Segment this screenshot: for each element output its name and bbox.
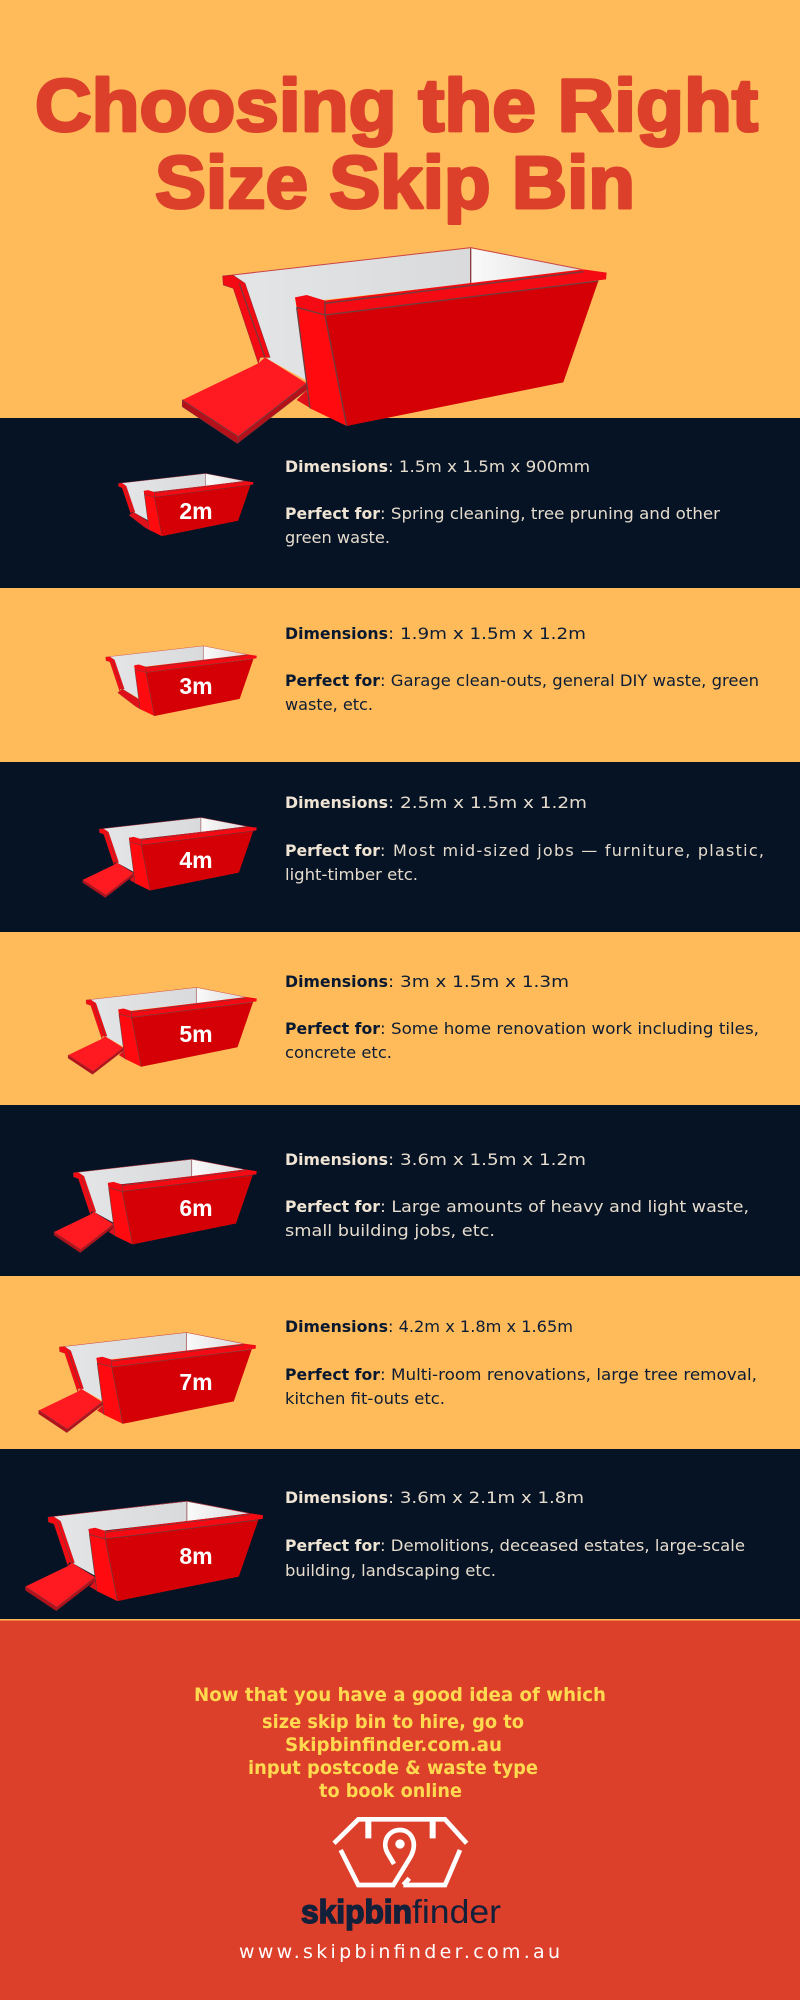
perfect for: Perfect for xyxy=(285,671,380,690)
dimensions: Dimensions xyxy=(285,1150,388,1169)
icon: 8m bin xyxy=(25,1501,263,1611)
panel: 2m xyxy=(0,418,800,588)
perfect for: green waste. xyxy=(285,528,390,547)
icon: 2m bin xyxy=(118,473,253,536)
perfect for xyxy=(285,1365,757,1408)
call to action text: size skip bin to hire, go to xyxy=(262,1711,524,1733)
label: 6m: 6m xyxy=(179,1195,213,1221)
perfect for: building, landscaping etc. xyxy=(285,1561,496,1580)
dimensions: : 4.2m x 1.8m x 1.65m xyxy=(388,1317,573,1336)
panel: 6m xyxy=(0,1105,800,1276)
dimensions: Dimensions xyxy=(285,457,388,476)
logo wordmark xyxy=(301,1893,501,1930)
icon: 3m bin xyxy=(106,646,257,716)
label: 5m: 5m xyxy=(179,1021,213,1047)
perfect for: : Multi-room renovations, large tree removal, xyxy=(380,1365,757,1384)
background: orange header xyxy=(0,0,800,418)
perfect for xyxy=(285,1197,749,1240)
band xyxy=(0,1449,800,1620)
dimensions xyxy=(285,457,590,476)
dimensions xyxy=(285,624,586,643)
icon: 7m bin xyxy=(39,1332,256,1433)
call to action text: Skipbinfinder.com.au xyxy=(285,1734,502,1756)
icon: 4m bin xyxy=(83,817,257,898)
perfect for xyxy=(285,1536,745,1580)
perfect for xyxy=(285,671,759,714)
call to action text: to book online xyxy=(319,1780,462,1802)
perfect for: : Spring cleaning, tree pruning and other xyxy=(380,504,720,523)
perfect for xyxy=(285,841,764,884)
dimensions: Dimensions xyxy=(285,1317,388,1336)
icon: hero skip bin xyxy=(182,248,607,443)
label: 2m: 2m xyxy=(179,498,213,524)
perfect for: waste, etc. xyxy=(285,695,373,714)
perfect for: : Garage clean-outs, general DIY waste, green xyxy=(380,671,759,690)
call to action text xyxy=(194,1684,606,1802)
dimensions xyxy=(285,1317,573,1336)
perfect for: : Demolitions, deceased estates, large-scale xyxy=(380,1536,745,1555)
perfect for: Perfect for xyxy=(285,1019,380,1038)
band xyxy=(0,588,800,762)
dimensions xyxy=(285,972,569,991)
icon: skipbinfinder logo mark xyxy=(334,1819,467,1885)
dimensions: : 3.6m x 2.1m x 1.8m xyxy=(388,1488,584,1507)
dimensions: : 3.6m x 1.5m x 1.2m xyxy=(388,1150,586,1169)
dimensions: Dimensions xyxy=(285,1488,388,1507)
dimensions: Dimensions xyxy=(285,624,388,643)
dimensions: Dimensions xyxy=(285,793,388,812)
perfect for: kitchen fit-outs etc. xyxy=(285,1389,445,1408)
perfect for xyxy=(285,504,720,547)
band xyxy=(0,762,800,932)
perfect for: : Large amounts of heavy and light waste, xyxy=(380,1197,749,1216)
logo wordmark: skipbin xyxy=(301,1893,412,1930)
perfect for: Perfect for xyxy=(285,841,380,860)
dimensions xyxy=(285,793,587,812)
title: Size Skip Bin xyxy=(155,141,635,224)
dimensions: : 2.5m x 1.5m x 1.2m xyxy=(388,793,587,812)
perfect for: Perfect for xyxy=(285,504,380,523)
perfect for: : Most mid-sized jobs — furniture, plastic, xyxy=(380,841,764,860)
panel: 3m xyxy=(0,588,800,762)
dimensions: : 3m x 1.5m x 1.3m xyxy=(388,972,569,991)
perfect for: light-timber etc. xyxy=(285,865,418,884)
band xyxy=(0,932,800,1105)
website url: www.skipbinfinder.com.au xyxy=(239,1941,560,1963)
perfect for xyxy=(285,1019,759,1062)
icon: 5m bin xyxy=(68,987,257,1074)
band xyxy=(0,1105,800,1276)
perfect for: Perfect for xyxy=(285,1536,380,1555)
call to action text: input postcode & waste type xyxy=(248,1757,538,1779)
call to action text: Now that you have a good idea of which xyxy=(194,1684,606,1706)
panel: 8m xyxy=(0,1449,800,1620)
dimensions: : 1.5m x 1.5m x 900mm xyxy=(388,457,590,476)
perfect for: small building jobs, etc. xyxy=(285,1221,495,1240)
divider line xyxy=(0,1619,800,1620)
label: 3m: 3m xyxy=(179,673,213,699)
panel: footer xyxy=(0,1619,800,2000)
dimensions: : 1.9m x 1.5m x 1.2m xyxy=(388,624,586,643)
icon: 6m bin xyxy=(54,1159,257,1253)
title xyxy=(35,64,758,224)
perfect for: : Some home renovation work including tiles, xyxy=(380,1019,759,1038)
label: 4m: 4m xyxy=(179,847,213,873)
band xyxy=(0,1276,800,1449)
perfect for: Perfect for xyxy=(285,1365,380,1384)
title: Choosing the Right xyxy=(35,64,758,147)
logo wordmark: finder xyxy=(412,1893,501,1930)
perfect for: Perfect for xyxy=(285,1197,380,1216)
dimensions: Dimensions xyxy=(285,972,388,991)
dimensions xyxy=(285,1150,586,1169)
dimensions xyxy=(285,1488,584,1507)
label: 8m: 8m xyxy=(179,1543,213,1569)
panel: 4m xyxy=(0,762,800,932)
label: 7m: 7m xyxy=(179,1369,213,1395)
panel: 7m xyxy=(0,1276,800,1449)
panel: 5m xyxy=(0,932,800,1105)
footer background xyxy=(0,1620,800,2000)
band xyxy=(0,418,800,588)
perfect for: concrete etc. xyxy=(285,1043,392,1062)
